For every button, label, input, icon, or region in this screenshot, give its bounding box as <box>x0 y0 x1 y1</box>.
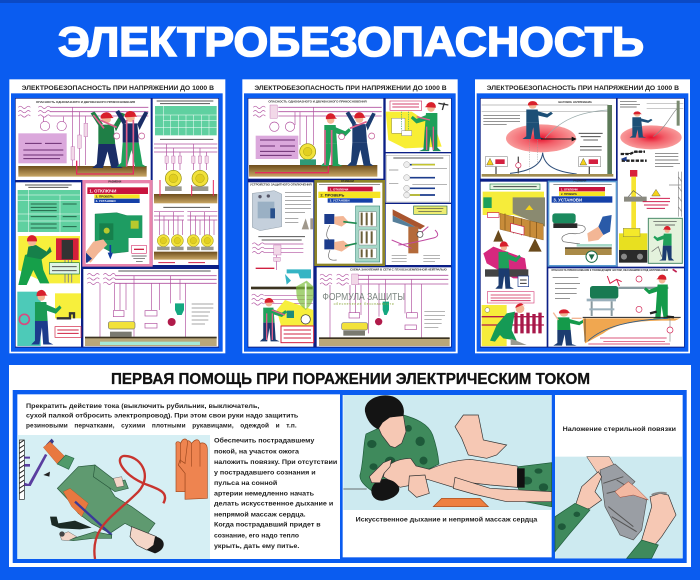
icon: wall with switch and rescuer arm <box>19 439 74 499</box>
care text: артерии немедленно начать <box>214 490 314 497</box>
first aid heading: ПЕРВАЯ ПОМОЩЬ ПРИ ПОРАЖЕНИИ ЭЛЕКТРИЧЕСКИМ ТОКОМ <box>111 371 590 388</box>
first aid column: resuscitation <box>343 395 552 557</box>
sub-panel: touch voltage: ОПАСНОСТЬ ПРИКОСНОВЕНИЯ К ТОКОВЕДУЩИМ ЧАСТЯМ, ОКАЗАВШИМСЯ ПОД НАПРЯЖЕНИЕМ <box>551 268 669 272</box>
care text: делать искусственное дыхание и <box>214 501 333 508</box>
sub-panel: upper-right, wire repair <box>386 99 451 152</box>
poster 1 heading: ЭЛЕКТРОБЕЗОПАСНОСТЬ ПРИ НАПРЯЖЕНИИ ДО 1000 В <box>22 85 214 92</box>
sub-panel: step 1 switch off: 3. УСТАНОВИ <box>96 199 115 203</box>
instruction text: сухой палкой отбросить электропровод). При этом свои руки надо защитить <box>26 411 298 419</box>
watermark <box>296 281 405 310</box>
care text <box>214 437 337 550</box>
poster 3 heading: ЭЛЕКТРОБЕЗОПАСНОСТЬ ПРИ НАПРЯЖЕНИИ ДО 1000 В <box>487 85 679 92</box>
care text: Когда пострадавший придет в <box>214 521 321 529</box>
sub-panel: step 1 switch off: 2. ПРОВЕРЬ <box>96 195 115 199</box>
sub-panel: neutral grounding scheme: СХЕМА ЗАНУЛЕНИЯ В СЕТИ С ГЛУХОЗАЗЕМЛЕННОЙ НЕЙТРАЛЬЮ <box>350 268 447 272</box>
sub-panel: step 3 install: РАЗМЕНИ <box>573 179 586 183</box>
sub-panel: step 2 check: РАЗМЕНИ <box>341 179 354 183</box>
care text: у пострадавшего сознания и <box>214 469 316 476</box>
sub-panel: step 1 switch off <box>82 180 153 267</box>
sub-panel: fallen wire <box>618 99 684 170</box>
care text: пульса на сонной <box>214 479 277 487</box>
sub-panel: step 2 check: 2. ПРОВЕРЬ <box>320 192 345 197</box>
sub-panel: step 2 check: 1. ОТКЛЮЧИ <box>330 187 348 191</box>
sub-panel: grounding scheme <box>83 269 218 347</box>
sub-panel: contact with motor: ОПАСНОСТЬ ОДНОФАЗНОГО И ДВУХФАЗНОГО ПРИКОСНОВЕНИЯ <box>268 100 367 104</box>
care text: Обеспечить пострадавшему <box>214 437 315 445</box>
sub-panel: neutral grounding scheme <box>317 267 451 347</box>
panel: poster 3 <box>475 79 690 353</box>
sub-panel: step 1 switch off: 1. ОТКЛЮЧИ <box>89 188 116 193</box>
care text: сознание, его надо тепло <box>214 532 299 539</box>
sub-panel: motors grounding schemes <box>153 99 218 265</box>
sub-panel: step voltage <box>481 99 616 179</box>
first aid column: bandage <box>555 395 683 558</box>
care text: непрямой массаж сердца. <box>214 510 306 518</box>
sub-panel: touch voltage <box>548 268 684 347</box>
sub-panel: step 3 install <box>548 179 617 267</box>
icon: rescuer <box>360 395 507 491</box>
watermark: ФОРМУЛА ЗАЩИТЫ <box>322 292 405 303</box>
sub-panel: single and two phase contact: ОПАСНОСТЬ ОДНОФАЗНОГО И ДВУХФАЗНОГО ПРИКОСНОВЕНИЯ <box>36 100 135 104</box>
resuscitation caption: Искусственное дыхание и непрямой массаж сердца <box>356 515 538 523</box>
sub-panel: roof grounding <box>386 204 451 265</box>
care text: наложить повязку. При отсутствии <box>214 459 337 466</box>
sub-panel: contact with motor <box>248 99 383 179</box>
sub-panel: step 3 install: 2. ПРОВЕРЬ <box>561 192 577 196</box>
instruction text: резиновыми перчатками, сухими плотными рукавицами, одеждой и т.п. <box>26 421 297 429</box>
sub-panel: single and two phase contact <box>16 99 151 180</box>
sub-panel: protective device and scheme <box>248 182 314 347</box>
panel: poster 2 <box>242 79 458 353</box>
icon: patient <box>369 458 552 507</box>
bandage caption: Наложение стерильной повязки <box>563 425 676 433</box>
sub-panel: step 3 install: 1. ОТКЛЮЧИ <box>561 187 578 191</box>
sub-panel: fences and pipeline <box>481 182 547 347</box>
icon: injured person <box>50 456 165 559</box>
sub-panel: current effects table and workers <box>16 182 81 347</box>
instruction text: Прекратить действие тока (выключить рубильник, выключатель, <box>26 402 260 410</box>
poster 2 heading: ЭЛЕКТРОБЕЗОПАСНОСТЬ ПРИ НАПРЯЖЕНИИ ДО 1000 В <box>254 85 447 92</box>
watermark: обеспечение безопасности <box>334 302 394 306</box>
sub-panel: step 2 check: 3. УСТАНОВИ <box>330 199 349 203</box>
sub-panel: crane safety <box>618 170 684 267</box>
sub-panel: protective device and scheme: УСТРОЙСТВО ЗАЩИТНОГО ОТКЛЮЧЕНИЯ <box>250 183 312 187</box>
sub-panel: step voltage: ШАГОВОЕ НАПРЯЖЕНИЕ <box>558 100 592 104</box>
first aid column: stop current <box>17 394 340 559</box>
care text: покой, на участок ожога <box>214 447 299 455</box>
panel: first aid <box>9 365 691 567</box>
sub-panel: zero conductor diagram <box>386 153 451 203</box>
sub-panel: step 3 install: 3. УСТАНОВИ <box>553 197 582 202</box>
panel: poster 1 <box>9 79 225 353</box>
instruction text <box>26 402 298 429</box>
title: ЭЛЕКТРОБЕЗОПАСНОСТЬ <box>58 18 644 65</box>
icon: rubber gloves <box>176 439 207 499</box>
sub-panel: step 1 switch off: РАЗМЕНИ <box>108 180 121 184</box>
icon: bandaged arm <box>555 457 676 558</box>
care text: укрыть, дать ему питье. <box>214 543 300 550</box>
sub-panel: step 2 check <box>314 179 385 266</box>
